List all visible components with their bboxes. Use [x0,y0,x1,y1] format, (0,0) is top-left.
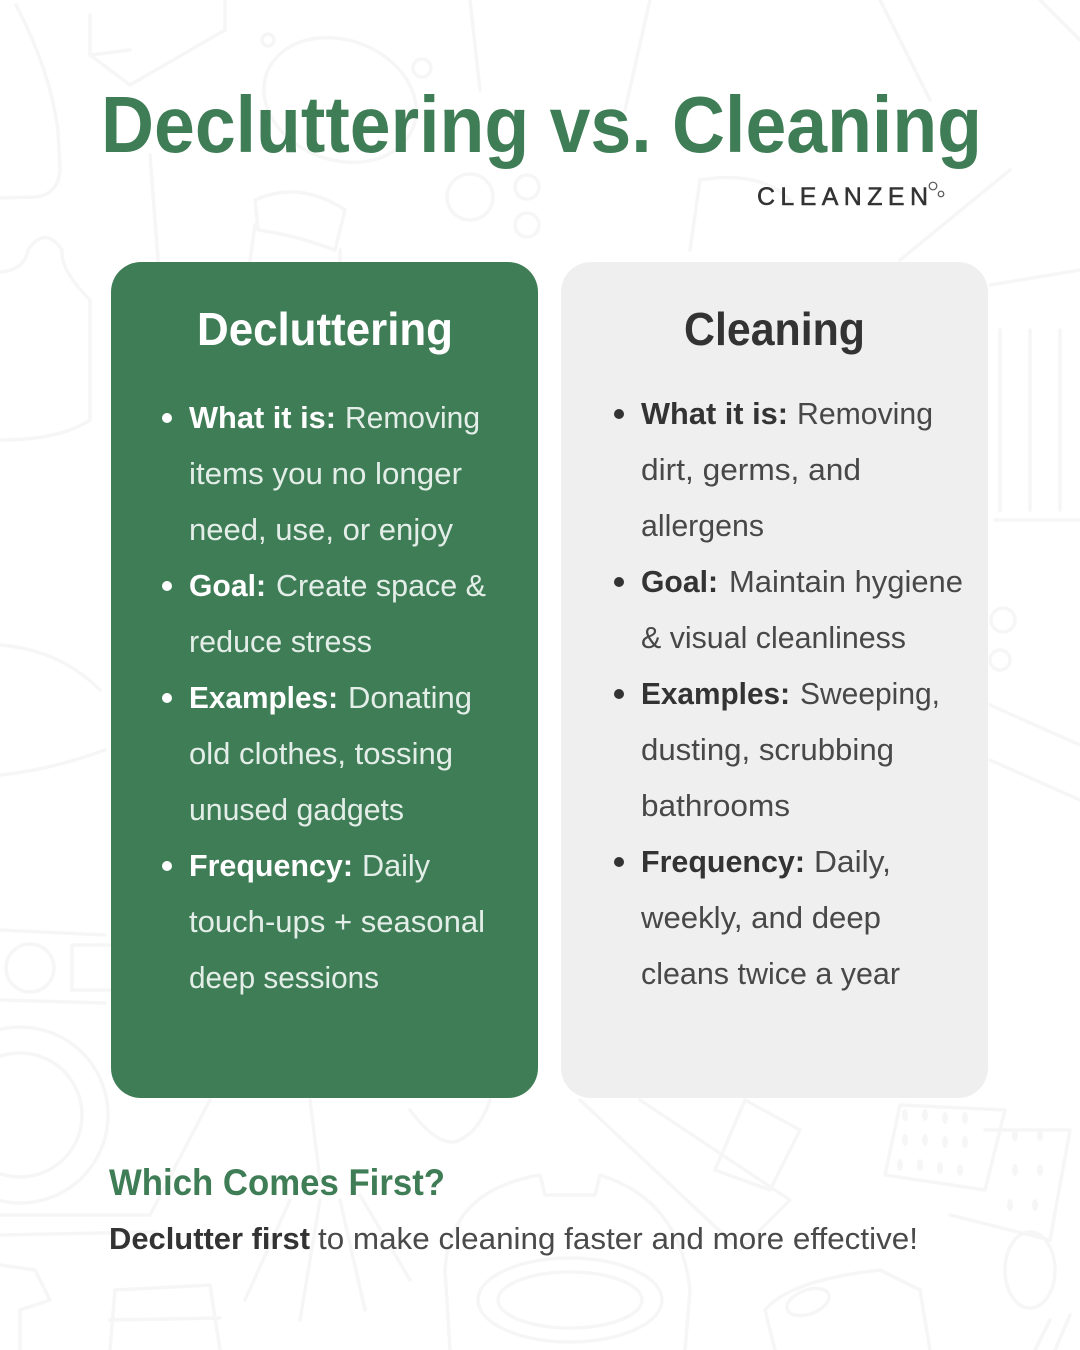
bullet: frequency: touch-ups + seasonal [189,904,485,939]
bullet: frequency: Frequency: [189,848,353,883]
panel: decluttering [111,262,538,1098]
bullet: examples [614,676,940,823]
bullet: frequency: Daily [362,848,430,883]
bullet: goal: Create space & [276,568,486,603]
bullet: goal: Goal: [189,568,266,603]
bullet: what it is: What it is: [641,396,788,431]
bullet: examples: old clothes, tossing [189,736,453,771]
bullet: frequency [162,848,485,995]
bullet: goal [614,564,963,655]
bullet: examples: unused gadgets [189,792,404,827]
bullet: what it is: items you no longer [189,456,462,491]
bullet: frequency: Frequency: [641,844,805,879]
heading: cleaning: Cleaning [684,303,865,355]
conclusion text: to make cleaning faster and more effective! [318,1221,918,1256]
bullet: examples: dusting, scrubbing [641,732,894,767]
bullet: examples: Examples: [641,676,790,711]
bullet: what it is: Removing [797,396,933,431]
bullet: what it is [162,400,480,547]
subheading: which comes first: Which Comes First? [109,1162,445,1203]
bullet: what it is: allergens [641,508,764,543]
heading: decluttering: Decluttering [197,303,453,355]
bullet: what it is [614,396,933,543]
logo: CLEANZEN: CLEANZEN [757,183,928,211]
bullet: what it is: dirt, germs, and [641,452,861,487]
bullet: frequency: cleans twice a year [641,956,900,991]
bullet: frequency: Daily, [814,844,891,879]
bullet: frequency: weekly, and deep [640,900,881,935]
bullet: frequency [614,844,900,991]
bullet: goal: Maintain hygiene [729,564,963,599]
bullet: examples: Donating [348,680,472,715]
bullet: goal: Goal: [641,564,718,599]
bullet: examples: Sweeping, [800,676,940,711]
bullet: examples: Examples: [189,680,338,715]
title: Decluttering vs. Cleaning [101,80,982,169]
bullet: goal [162,568,486,659]
bullet: goal: reduce stress [189,624,372,659]
bullet: frequency: deep sessions [189,960,379,995]
conclusion text: Declutter first [109,1221,310,1256]
bullet: what it is: need, use, or enjoy [189,512,453,547]
bullet: goal: & visual cleanliness [641,620,906,655]
panel: cleaning [561,262,988,1098]
bullet: examples: bathrooms [641,788,790,823]
bullet: what it is: What it is: [189,400,336,435]
bullet: what it is: Removing [345,400,480,435]
bullet: examples [162,680,472,827]
